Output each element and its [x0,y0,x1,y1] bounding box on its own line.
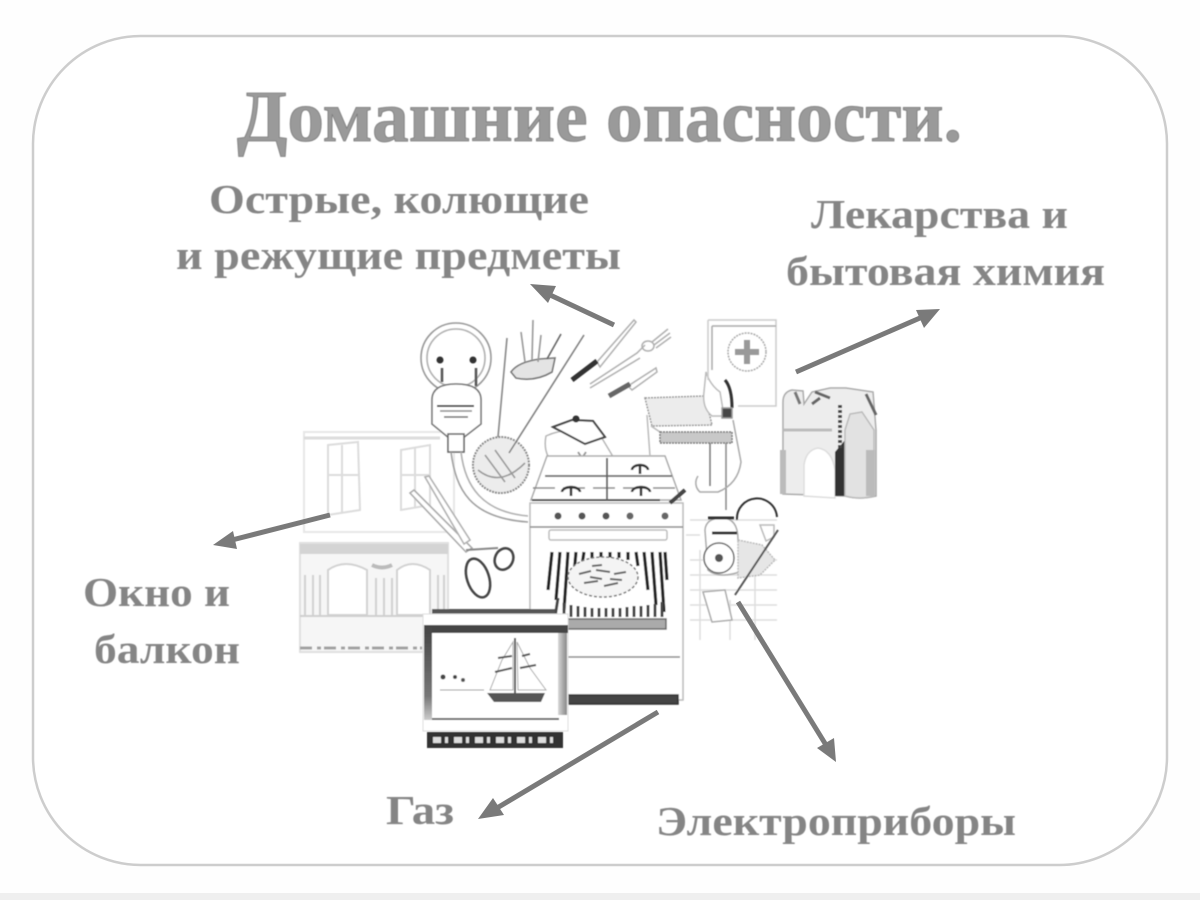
illustration: pin cushion and pins [511,320,561,379]
arrow: to appliances [738,602,836,762]
illustration: household hazards collage [300,320,876,748]
label: sharp objects: Острые, колющие [209,176,589,222]
illustration: gas stove [530,456,685,704]
illustration: television with ship [423,609,568,748]
arrow: to medicine [796,309,940,372]
label: medicine and chemicals: бытовая химия [786,248,1105,294]
label: electric appliances: Электроприборы [656,798,1016,844]
label: window and balcony [83,569,240,672]
label: window and balcony: Окно и [83,569,230,615]
illustration: iron and stool [645,372,741,510]
label: window and balcony: балкон [94,626,240,672]
label: medicine and chemicals: Лекарства и [811,191,1068,237]
label: sharp objects [176,176,621,278]
illustration: window and balcony [300,432,454,652]
arrow: to sharp objects [530,284,614,325]
label: gas: Газ [386,787,454,833]
illustration: electric plug and socket [421,323,528,522]
illustration: scissors [410,476,517,600]
illustration: ball of yarn with needles [473,335,584,493]
label: sharp objects: и режущие предметы [176,232,621,278]
oven window with pizza [548,552,667,629]
illustration: knives and fork [572,320,671,396]
illustration: kettle [545,416,612,471]
illustration: medicine and cleaning bottles [783,388,876,498]
label: medicine and chemicals [786,191,1105,294]
arrow: to gas [478,712,658,819]
title: Домашние опасности. [237,76,962,157]
arrow: to window [213,515,330,549]
illustration: vacuum cleaner and socket [686,498,778,640]
illustration: medicine cabinet [708,320,776,406]
